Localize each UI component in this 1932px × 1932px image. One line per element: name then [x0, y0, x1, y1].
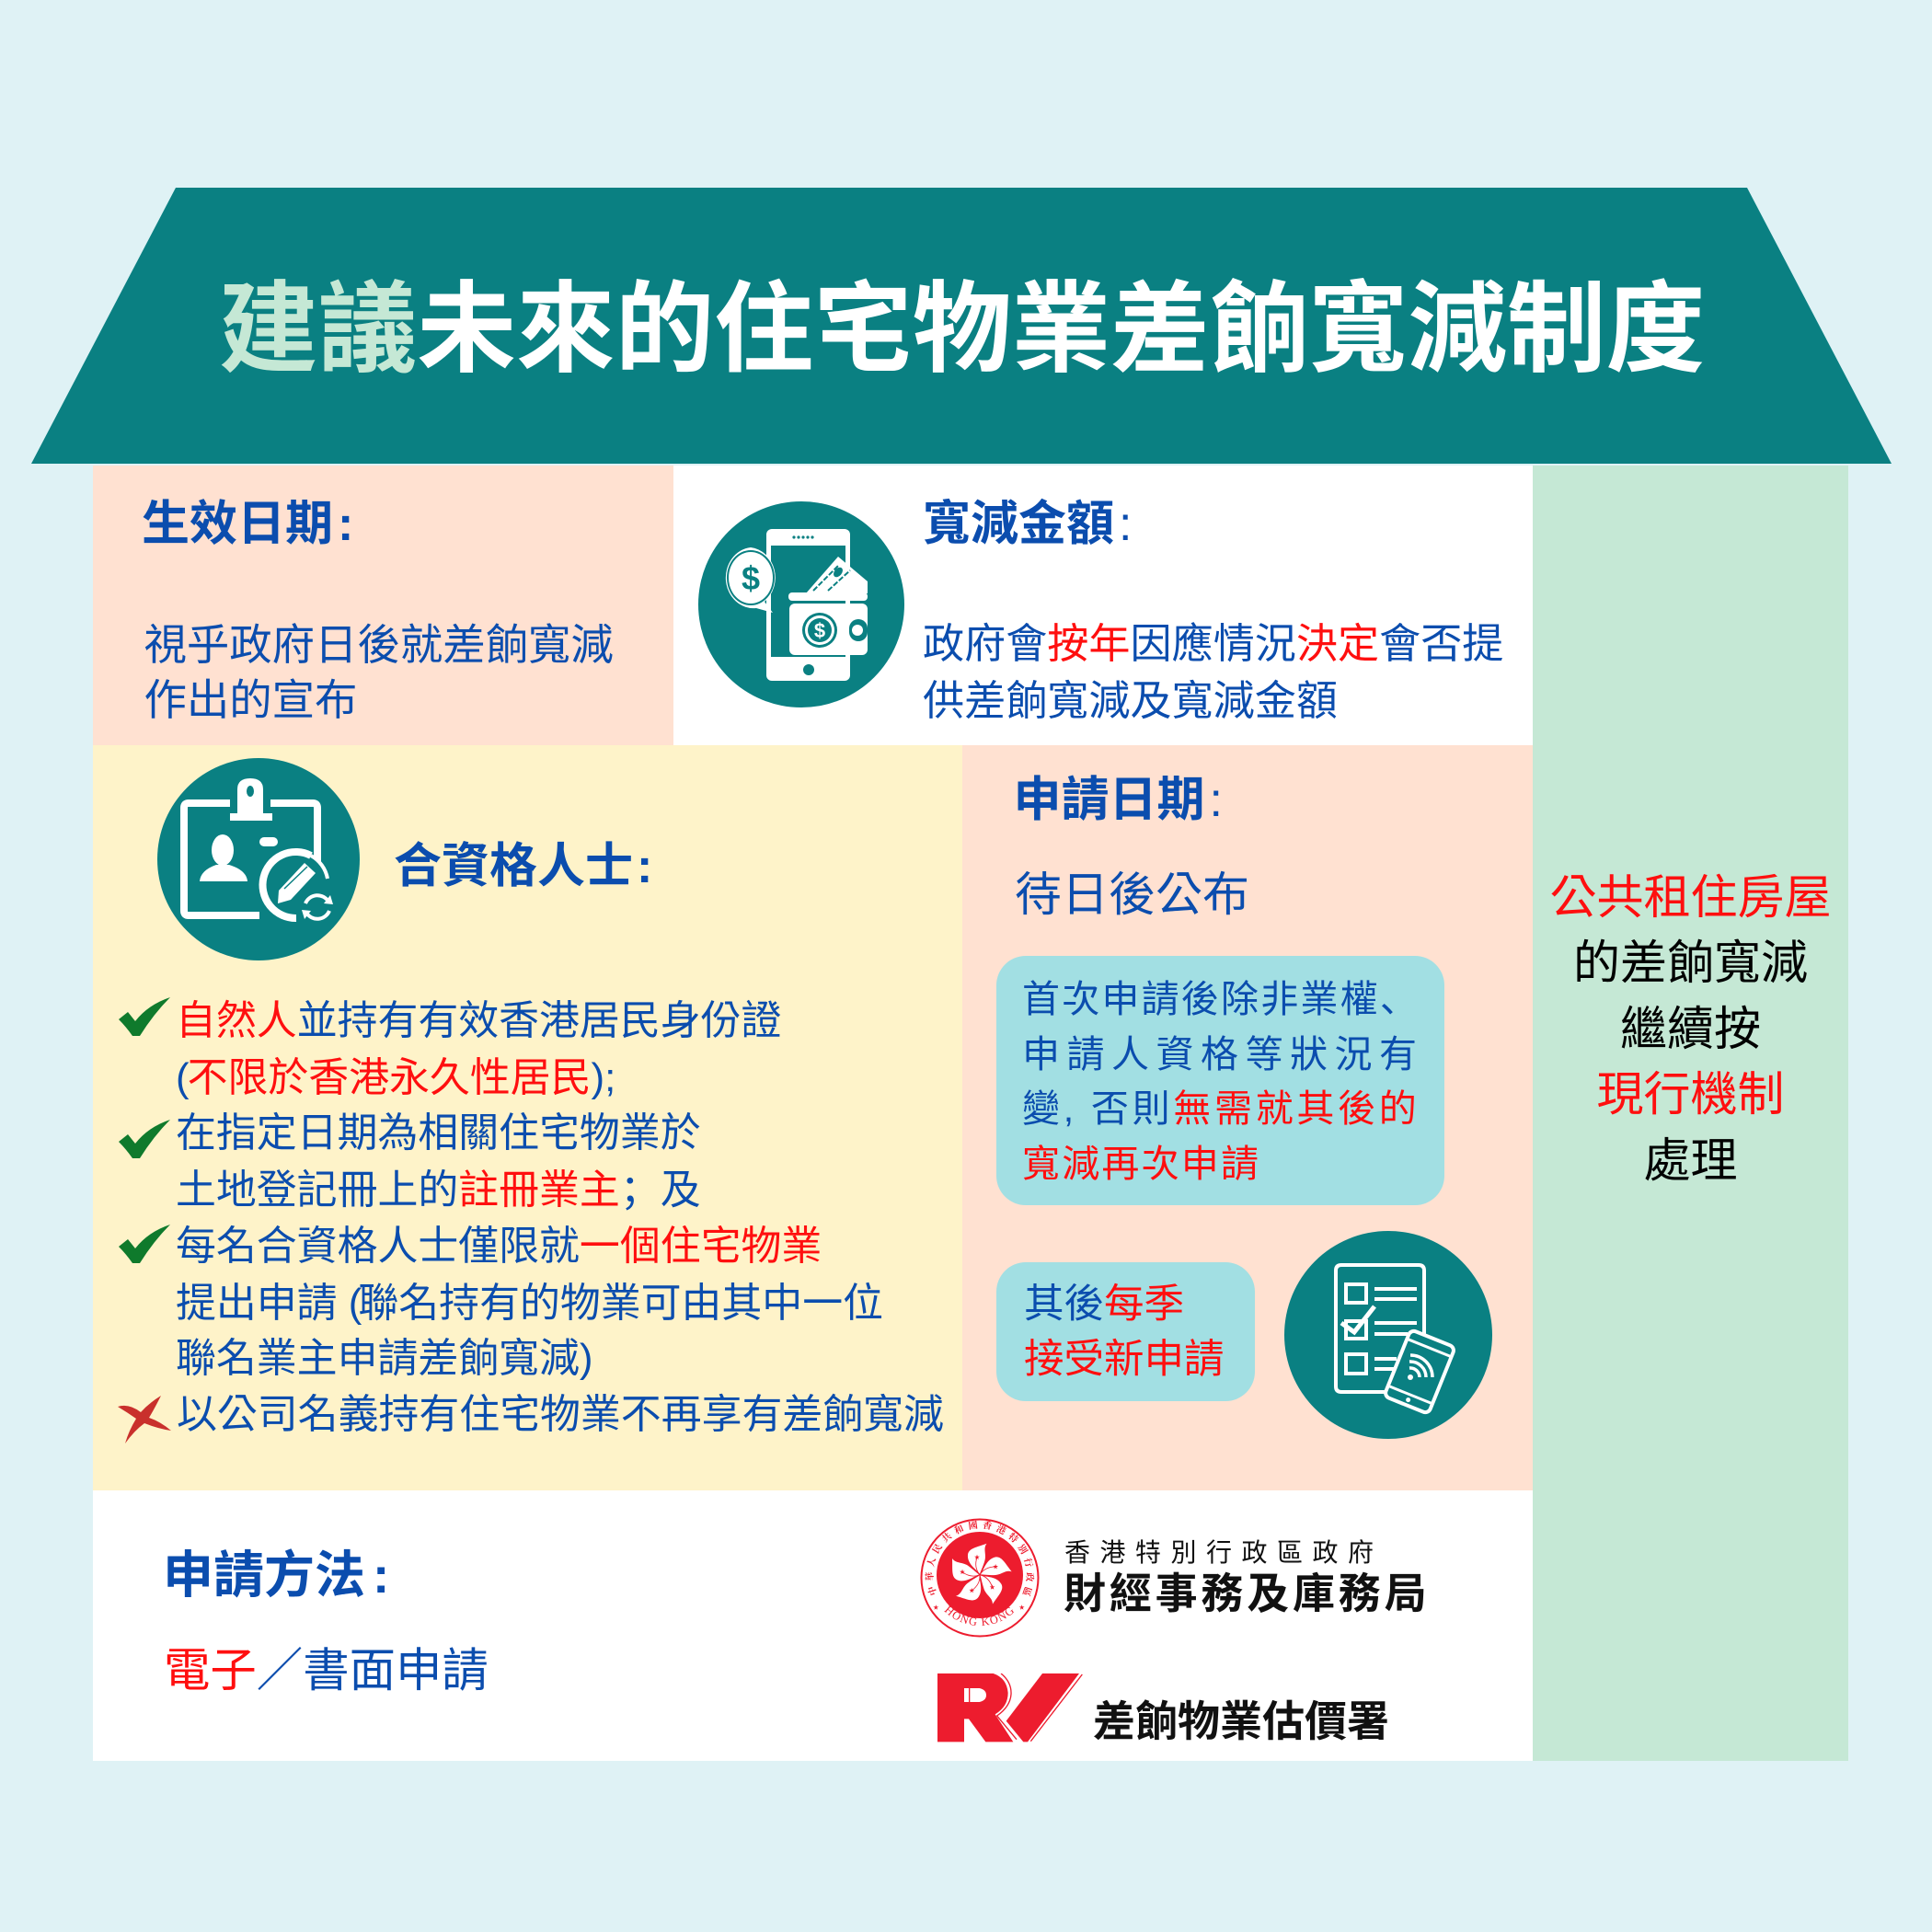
icon: checklist and phone [1284, 1231, 1492, 1439]
callout: first application: 首次申請後除非業權、 [1022, 978, 1420, 1020]
bullet text 1: 自然人並持有有效香港居民身份證 [176, 998, 781, 1043]
icon: check 3 [119, 1225, 170, 1263]
callout: quarterly application [996, 1262, 1255, 1401]
panel: application method and logos [93, 1490, 1533, 1761]
bullet text 3 [176, 1224, 883, 1381]
heading: eligible persons: 合資格人士: [394, 840, 652, 893]
panel: effective date [93, 466, 673, 745]
panel: application date [962, 745, 1533, 1490]
callout: first application: 寬減再次申請 [1022, 1143, 1260, 1185]
icon: phone and wallet [698, 501, 904, 707]
callout: first application: 變, 否則無需就其後的 [1022, 1087, 1420, 1130]
bullet text 2 [176, 1110, 701, 1213]
icon: phone and wallet: $ [814, 619, 825, 642]
text: application method: 電子／書面申請 [164, 1644, 489, 1696]
icon: phone and wallet: $ [742, 559, 760, 597]
heading: effective date: 生效日期: [142, 498, 353, 551]
text: bureau name: 財經事務及庫務局 [1064, 1570, 1430, 1617]
bullet text 2: 土地登記冊上的註冊業主；及 [176, 1167, 701, 1213]
logo: Hong Kong emblem: 中華人民共和國香港特別行政區 [925, 1520, 1034, 1597]
bullet text 1: (不限於香港永久性居民); [176, 1055, 615, 1100]
bullet text 2: 在指定日期為相關住宅物業於 [176, 1110, 701, 1156]
text: concession amount: 供差餉寬減及寬減金額 [923, 677, 1338, 724]
bullet text 3: 提出申請 (聯名持有的物業可由其中一位 [176, 1281, 883, 1326]
text: effective date: 視乎政府日後就差餉寬減 [144, 621, 614, 669]
text: concession amount [923, 620, 1503, 724]
bullet text 1 [176, 998, 781, 1100]
bullet text 3: 聯名業主申請差餉寬減) [176, 1336, 591, 1381]
heading: application method: 申請方法: [163, 1547, 389, 1604]
callout: quarterly application: 接受新申請 [1024, 1338, 1224, 1382]
logo: RV [937, 1673, 1083, 1742]
text: effective date: 作出的宣布 [144, 676, 357, 724]
title: 建議未來的住宅物業差餉寬減制度 [219, 274, 1705, 385]
heading: concession amount: 寬減金額: [923, 498, 1132, 551]
bullet text 3: 每名合資格人士僅限就一個住宅物業 [176, 1224, 822, 1269]
text line 1: 公共租住房屋 [1549, 871, 1831, 924]
panel: eligible persons [93, 745, 962, 1490]
panel: concession amount [673, 466, 1533, 745]
icon: check 2 [119, 1120, 170, 1158]
text line 5: 處理 [1643, 1134, 1737, 1187]
text: concession amount: 政府會按年因應情況決定會否提 [923, 620, 1503, 667]
callout: first application: 申請人資格等狀況有 [1022, 1033, 1424, 1075]
callout: first application [996, 956, 1444, 1205]
logo: Hong Kong emblem: HONG KONG [944, 1605, 1014, 1627]
text line 2: 的差餉寬減 [1573, 937, 1808, 989]
text: bureau name: 香港特別行政區政府 [1064, 1538, 1384, 1567]
icon: ID badge [157, 758, 360, 960]
logo: Hong Kong emblem [920, 1518, 1040, 1638]
heading: application date: 申請日期: [1014, 774, 1223, 827]
text: application date: 待日後公布 [1015, 868, 1249, 921]
text: department name: 差餉物業估價署 [1093, 1697, 1389, 1745]
panel: public rental housing note [1533, 466, 1848, 1761]
text: effective date [144, 621, 614, 724]
text line 3: 繼續按 [1620, 1003, 1761, 1055]
bullet text 4: 以公司名義持有住宅物業不再享有差餉寬減 [177, 1392, 944, 1437]
text line 4: 現行機制 [1596, 1068, 1785, 1121]
callout: quarterly application: 其後每季 [1024, 1282, 1184, 1327]
icon: cross [118, 1396, 171, 1443]
text: bureau name [1064, 1538, 1430, 1617]
icon: check 1 [119, 997, 170, 1036]
roof banner [31, 188, 1892, 464]
